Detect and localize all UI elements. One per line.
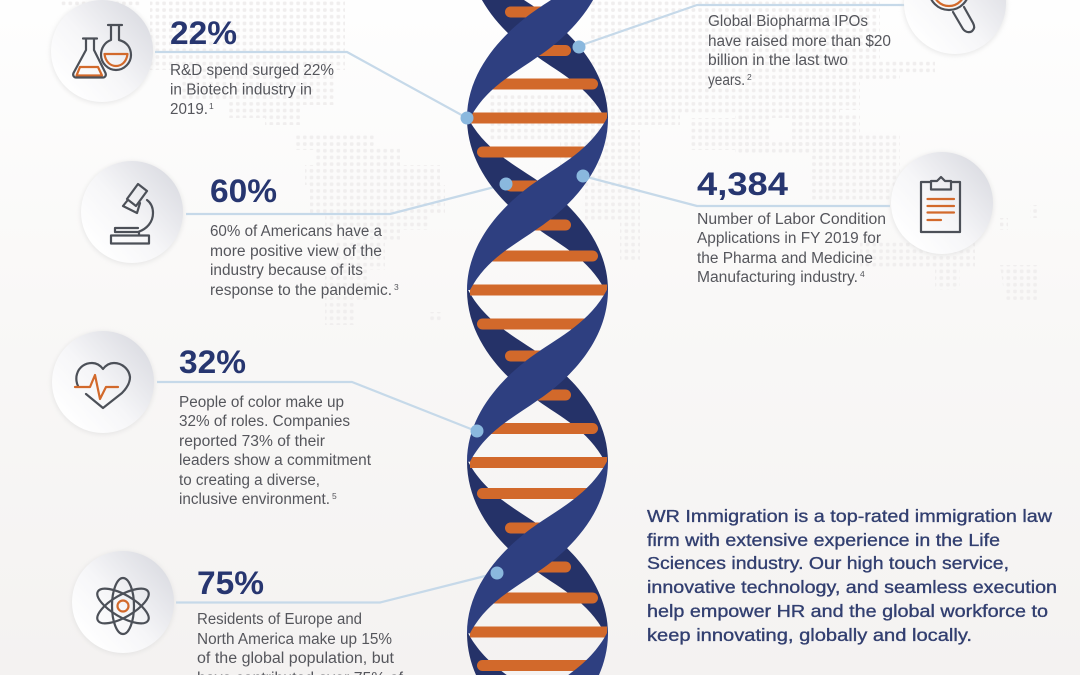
- stat: IPOs text: 2: [747, 72, 752, 82]
- stat: IPOs text: years.: [708, 72, 745, 89]
- stat: 4,384: Manufacturing industry.: [697, 269, 858, 286]
- stat: 32%: People of color make up: [179, 394, 344, 411]
- stat: 32%: leaders show a commitment: [179, 452, 372, 469]
- stat: 4,384: [697, 166, 886, 286]
- stat: 4,384: Number of Labor Condition: [697, 211, 886, 228]
- stat: 75%: North America make up 15%: [197, 631, 392, 648]
- stat: 22%: in Biotech industry in: [170, 82, 312, 98]
- stat: 32%: reported 73% of their: [179, 433, 325, 450]
- icon: heart with pulse: [51, 331, 155, 435]
- stat: 75%: of the global population, but: [197, 650, 395, 667]
- connector end dots: [460, 40, 590, 580]
- stat: 32%: 32%: [179, 344, 246, 380]
- stat: 75%: [197, 565, 404, 675]
- stat: IPOs text: [708, 13, 891, 89]
- stat: 4,384: the Pharma and Medicine: [697, 250, 873, 267]
- DNA double helix: [467, 0, 608, 675]
- stat: 22%: 1: [209, 101, 214, 111]
- stat: 75%: Residents of Europe and: [197, 611, 362, 628]
- stat: IPOs text: Global Biopharma IPOs: [708, 13, 868, 30]
- icon: microscope: [80, 161, 184, 265]
- connector lines: [155, 5, 905, 602]
- stat: 4,384: 4: [860, 269, 865, 279]
- stat: IPOs text: billion in the last two: [708, 52, 848, 69]
- text block: about WR Immigration: firm with extensive experience in the Life: [647, 530, 1000, 550]
- stat: 60%: more positive view of the: [210, 243, 382, 260]
- stat: 60%: 60% of Americans have a: [210, 223, 382, 240]
- icon: atom: [71, 551, 175, 655]
- text block: about WR Immigration: WR Immigration is a top-rated immigration law: [647, 506, 1052, 526]
- stat: IPOs text: have raised more than $20: [708, 33, 891, 50]
- text block: about WR Immigration: [647, 506, 1057, 645]
- stat: 60%: industry because of its: [210, 262, 363, 279]
- stat: 22%: [170, 15, 334, 118]
- stat: 32%: to creating a diverse,: [179, 472, 320, 489]
- icon: magnifying glass: [903, 0, 1007, 56]
- stat: 4,384: Applications in FY 2019 for: [697, 230, 881, 247]
- stat: 60%: response to the pandemic.: [210, 282, 392, 299]
- icon: clipboard: [890, 152, 994, 256]
- stat: 60%: [210, 173, 399, 299]
- stat: 22%: 2019.: [170, 101, 208, 118]
- text block: about WR Immigration: keep innovating, globally and locally.: [647, 625, 972, 645]
- text block: about WR Immigration: help empower HR and the global workforce to: [647, 601, 1048, 621]
- stat: 75%: 75%: [197, 565, 264, 601]
- icon: flasks: [50, 0, 154, 104]
- text block: about WR Immigration: innovative technology, and seamless execution: [647, 577, 1057, 597]
- stat: 60%: 3: [394, 282, 399, 292]
- stat: 22%: R&D spend surged 22%: [170, 62, 334, 79]
- stat: 32%: 32% of roles. Companies: [179, 413, 350, 430]
- stat: 32%: inclusive environment.: [179, 491, 330, 508]
- stat: 4,384: 4,384: [697, 166, 788, 202]
- stat: 32%: [179, 344, 372, 508]
- stat: 60%: 60%: [210, 173, 277, 209]
- text block: about WR Immigration: Sciences industry. Our high touch service,: [647, 553, 1009, 573]
- stat: 22%: 22%: [170, 15, 237, 51]
- stat: 32%: 5: [332, 491, 337, 501]
- dotted world map: [60, 0, 1040, 325]
